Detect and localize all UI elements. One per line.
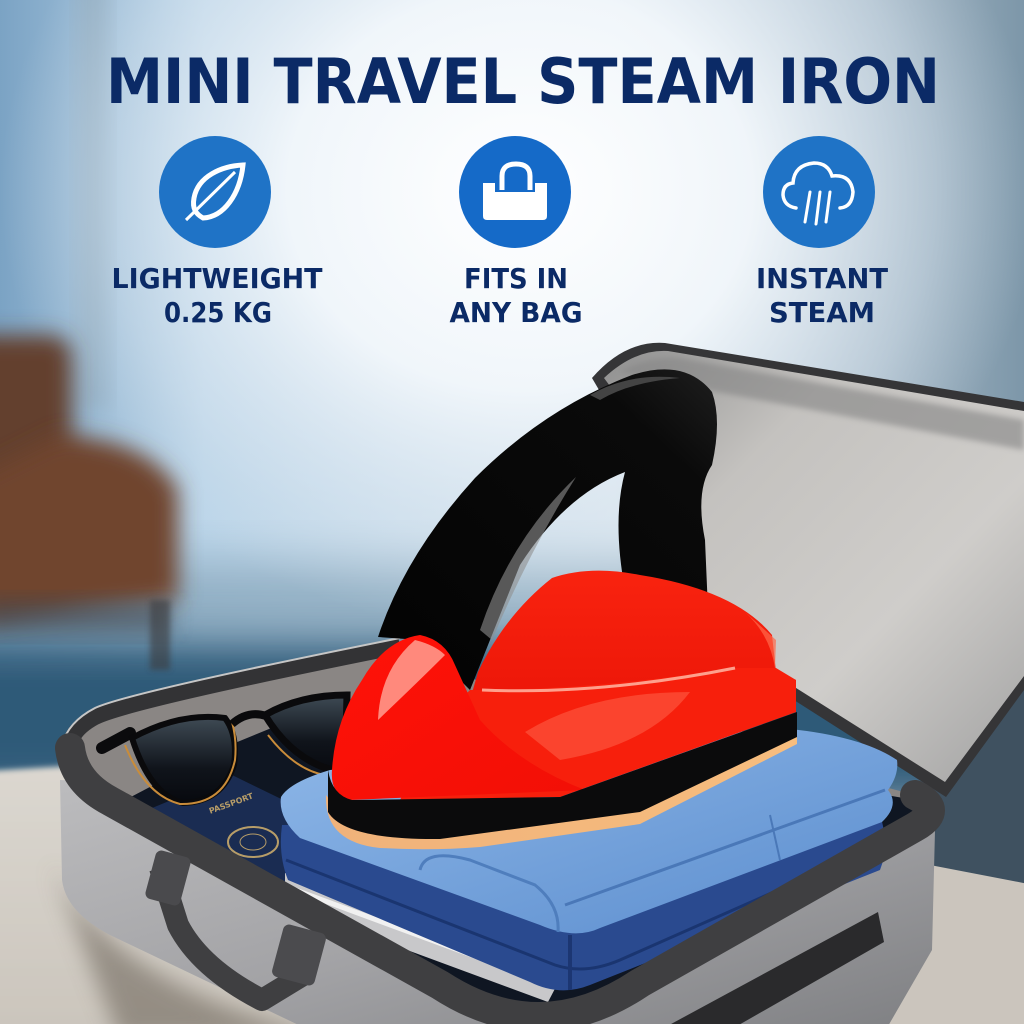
suitcase lid [592, 343, 1024, 797]
suitcase interior [70, 652, 930, 1017]
body highlights [482, 612, 776, 760]
label: fits in any bag: FITS IN [464, 262, 568, 295]
suitcase [60, 343, 1024, 1024]
passport: PASSPORT [208, 791, 255, 816]
feature: fits in any bag [450, 136, 582, 329]
latch slot [660, 912, 884, 1024]
handle [144, 849, 327, 1000]
suitcase rim [62, 638, 930, 1017]
label: instant steam [756, 262, 888, 329]
red upper housing [450, 571, 796, 795]
folded clothes [281, 728, 897, 1002]
icon: handbag [459, 136, 571, 248]
feature: instant steam [756, 136, 888, 329]
blue shirt [281, 728, 897, 933]
feature: lightweight [112, 136, 322, 329]
label: fits in any bag: ANY BAG [450, 296, 582, 329]
label: instant steam: INSTANT [756, 262, 888, 295]
red lower body [400, 668, 796, 800]
icon: feather [159, 136, 271, 248]
navy shirt [281, 815, 885, 990]
label: lightweight 0.25 kg: LIGHTWEIGHT [112, 262, 322, 295]
suitcase outer shell [60, 780, 935, 1024]
icon: steam cloud [763, 136, 875, 248]
label: lightweight 0.25 kg [112, 262, 322, 329]
white shirt [285, 873, 570, 1002]
iron handle [378, 369, 717, 690]
handle shine [480, 477, 576, 640]
passport [140, 775, 345, 905]
nose highlight [378, 640, 445, 720]
label: fits in any bag [450, 262, 582, 329]
red nose [332, 635, 585, 800]
plate under the iron [326, 730, 797, 849]
label: lightweight 0.25 kg: 0.25 KG [164, 296, 272, 329]
label: instant steam: STEAM [769, 296, 875, 329]
iron [326, 369, 797, 849]
title: MINI TRAVEL STEAM IRON [106, 45, 940, 118]
sunglasses [102, 695, 347, 804]
black base band [328, 712, 797, 839]
